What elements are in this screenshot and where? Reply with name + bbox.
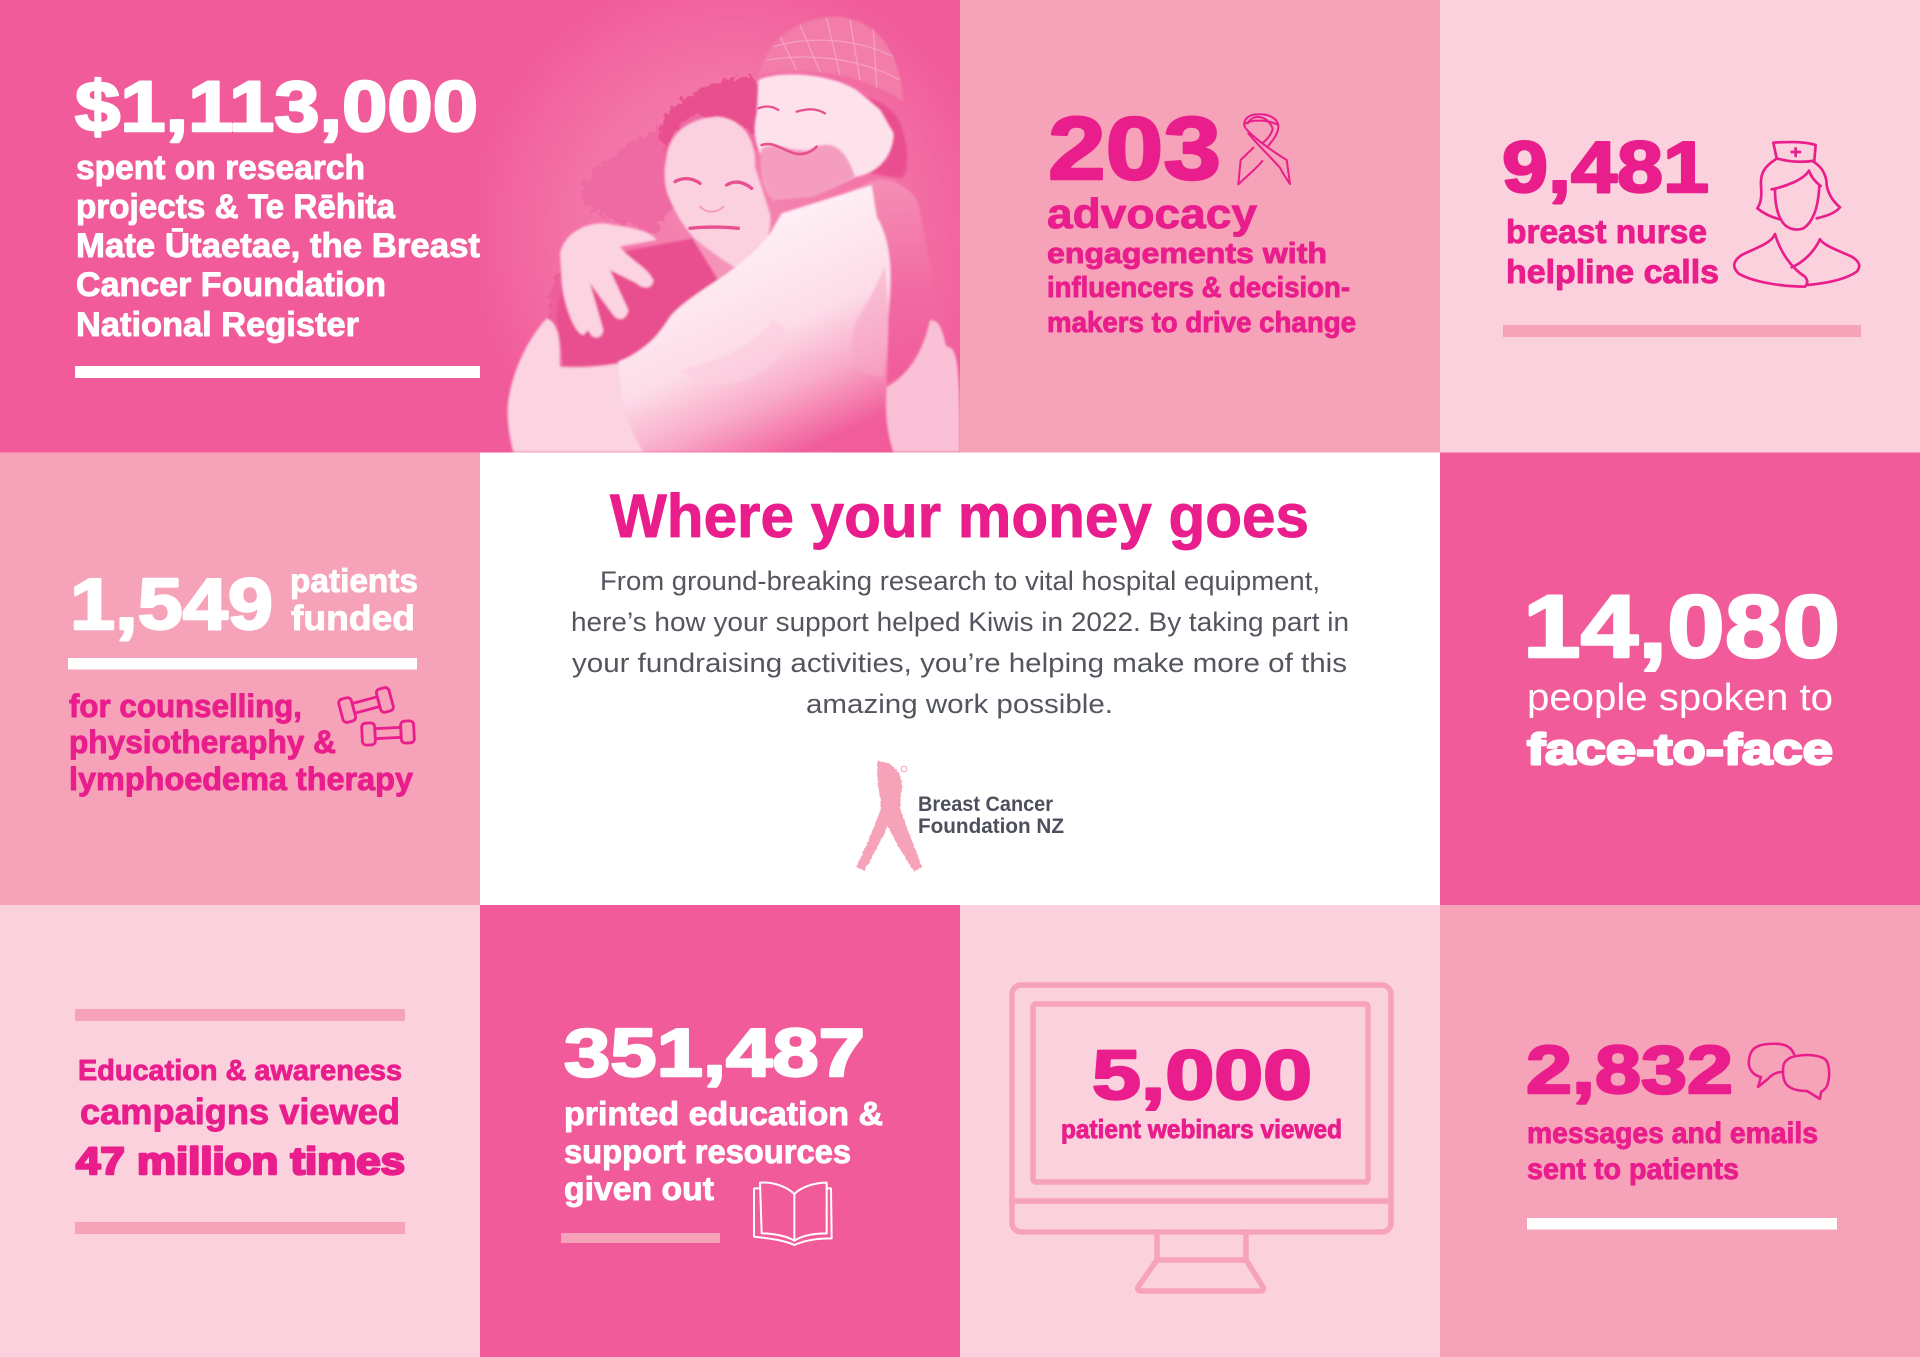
text: campaigns viewed xyxy=(76,1055,405,1183)
text: campaigns viewed: Education & awareness xyxy=(78,1055,402,1087)
logo: Breast Cancer Foundation NZ: Breast Cancer xyxy=(918,792,1054,816)
stat: $1,113,000: $1,113,000 xyxy=(75,68,478,147)
text: helpline description xyxy=(1506,213,1719,290)
text: advocacy description: engagements with xyxy=(1047,238,1327,270)
stat: 1,549: 1,549 xyxy=(70,565,273,645)
stat: 2,832: 2,832 xyxy=(1526,1032,1733,1108)
text: resources description xyxy=(564,1095,883,1207)
text: research description: projects & Te Rēhita xyxy=(76,188,396,226)
text: intro paragraph: From ground-breaking research to vital hospital equipment, xyxy=(600,566,1320,596)
logo ribbon xyxy=(856,761,922,871)
text: research description xyxy=(76,149,480,344)
text: intro paragraph: your fundraising activities, you’re helping make more of this xyxy=(572,648,1347,678)
text: intro paragraph: here’s how your support helped Kiwis in 2022. By taking part in xyxy=(571,607,1349,637)
logo: Breast Cancer Foundation NZ: Foundation NZ xyxy=(918,814,1064,838)
panel: where your money goes xyxy=(480,452,1440,905)
text: messages description xyxy=(1527,1117,1818,1186)
panel: printed resources xyxy=(480,905,960,1357)
text: patients funded xyxy=(290,562,418,638)
text: patient webinars viewed: patient webinars viewed xyxy=(1061,1114,1342,1144)
text: research description: spent on research xyxy=(76,149,365,187)
stat: 14,080: 14,080 xyxy=(1523,576,1840,676)
text: advocacy description: advocacy xyxy=(1047,190,1258,237)
title: Where your money goes xyxy=(610,482,1309,550)
text: advocacy description: influencers & decision- xyxy=(1047,272,1350,304)
text: research description: Mate Ūtaetae, the Breast xyxy=(76,227,480,265)
panel: people spoken to xyxy=(1440,452,1920,905)
icon: awareness ribbon xyxy=(1238,114,1290,184)
text: helpline description: helpline calls xyxy=(1506,253,1719,290)
text: advocacy description xyxy=(1047,190,1356,339)
stat: 5,000: 5,000 xyxy=(1092,1036,1312,1114)
icon: computer monitor xyxy=(1012,985,1391,1291)
text: therapy description xyxy=(69,688,413,797)
text: resources description: printed education & xyxy=(564,1095,883,1132)
text: campaigns viewed: 47 million times xyxy=(76,1141,405,1183)
text: intro paragraph xyxy=(571,566,1349,719)
text: people spoken to: people spoken to xyxy=(1527,677,1833,719)
text: helpline description: breast nurse xyxy=(1506,213,1707,250)
text: resources description: given out xyxy=(564,1170,714,1207)
panel: research funding xyxy=(0,0,960,452)
text: messages description: messages and emails xyxy=(1527,1117,1818,1150)
text: patients funded: patients xyxy=(290,562,418,599)
panel: advocacy engagements xyxy=(960,0,1440,452)
icon: nurse xyxy=(1734,142,1859,287)
stat: 203: 203 xyxy=(1048,98,1221,198)
text: research description: National Register xyxy=(76,306,359,344)
panel: messages and emails xyxy=(1440,905,1920,1357)
text: messages description: sent to patients xyxy=(1527,1153,1739,1186)
icon: open book xyxy=(754,1183,832,1245)
text: intro paragraph: amazing work possible. xyxy=(806,689,1113,719)
stat: 351,487: 351,487 xyxy=(564,1015,865,1091)
logo: Breast Cancer Foundation NZ xyxy=(856,761,1064,871)
panel: breast nurse helpline xyxy=(1440,0,1920,452)
text: campaigns viewed: campaigns viewed xyxy=(80,1091,400,1132)
text: resources description: support resources xyxy=(564,1133,851,1170)
panel: patients funded xyxy=(0,452,480,905)
text: face-to-face: face-to-face xyxy=(1527,725,1833,774)
text: therapy description: for counselling, xyxy=(69,688,302,724)
stat: 9,481: 9,481 xyxy=(1502,128,1709,208)
icon: speech bubbles xyxy=(1749,1044,1829,1099)
photo: two people hugging, pink duotone xyxy=(480,0,960,452)
text: therapy description: physiotheraphy & xyxy=(69,724,336,760)
panel: education and awareness xyxy=(0,905,480,1357)
text: research description: Cancer Foundation xyxy=(76,266,386,304)
panel: patient webinars xyxy=(960,905,1440,1357)
text: patients funded: funded xyxy=(291,599,415,638)
icon: dumbbells xyxy=(338,687,415,745)
text: therapy description: lymphoedema therapy xyxy=(69,761,413,797)
text: advocacy description: makers to drive change xyxy=(1047,307,1356,339)
